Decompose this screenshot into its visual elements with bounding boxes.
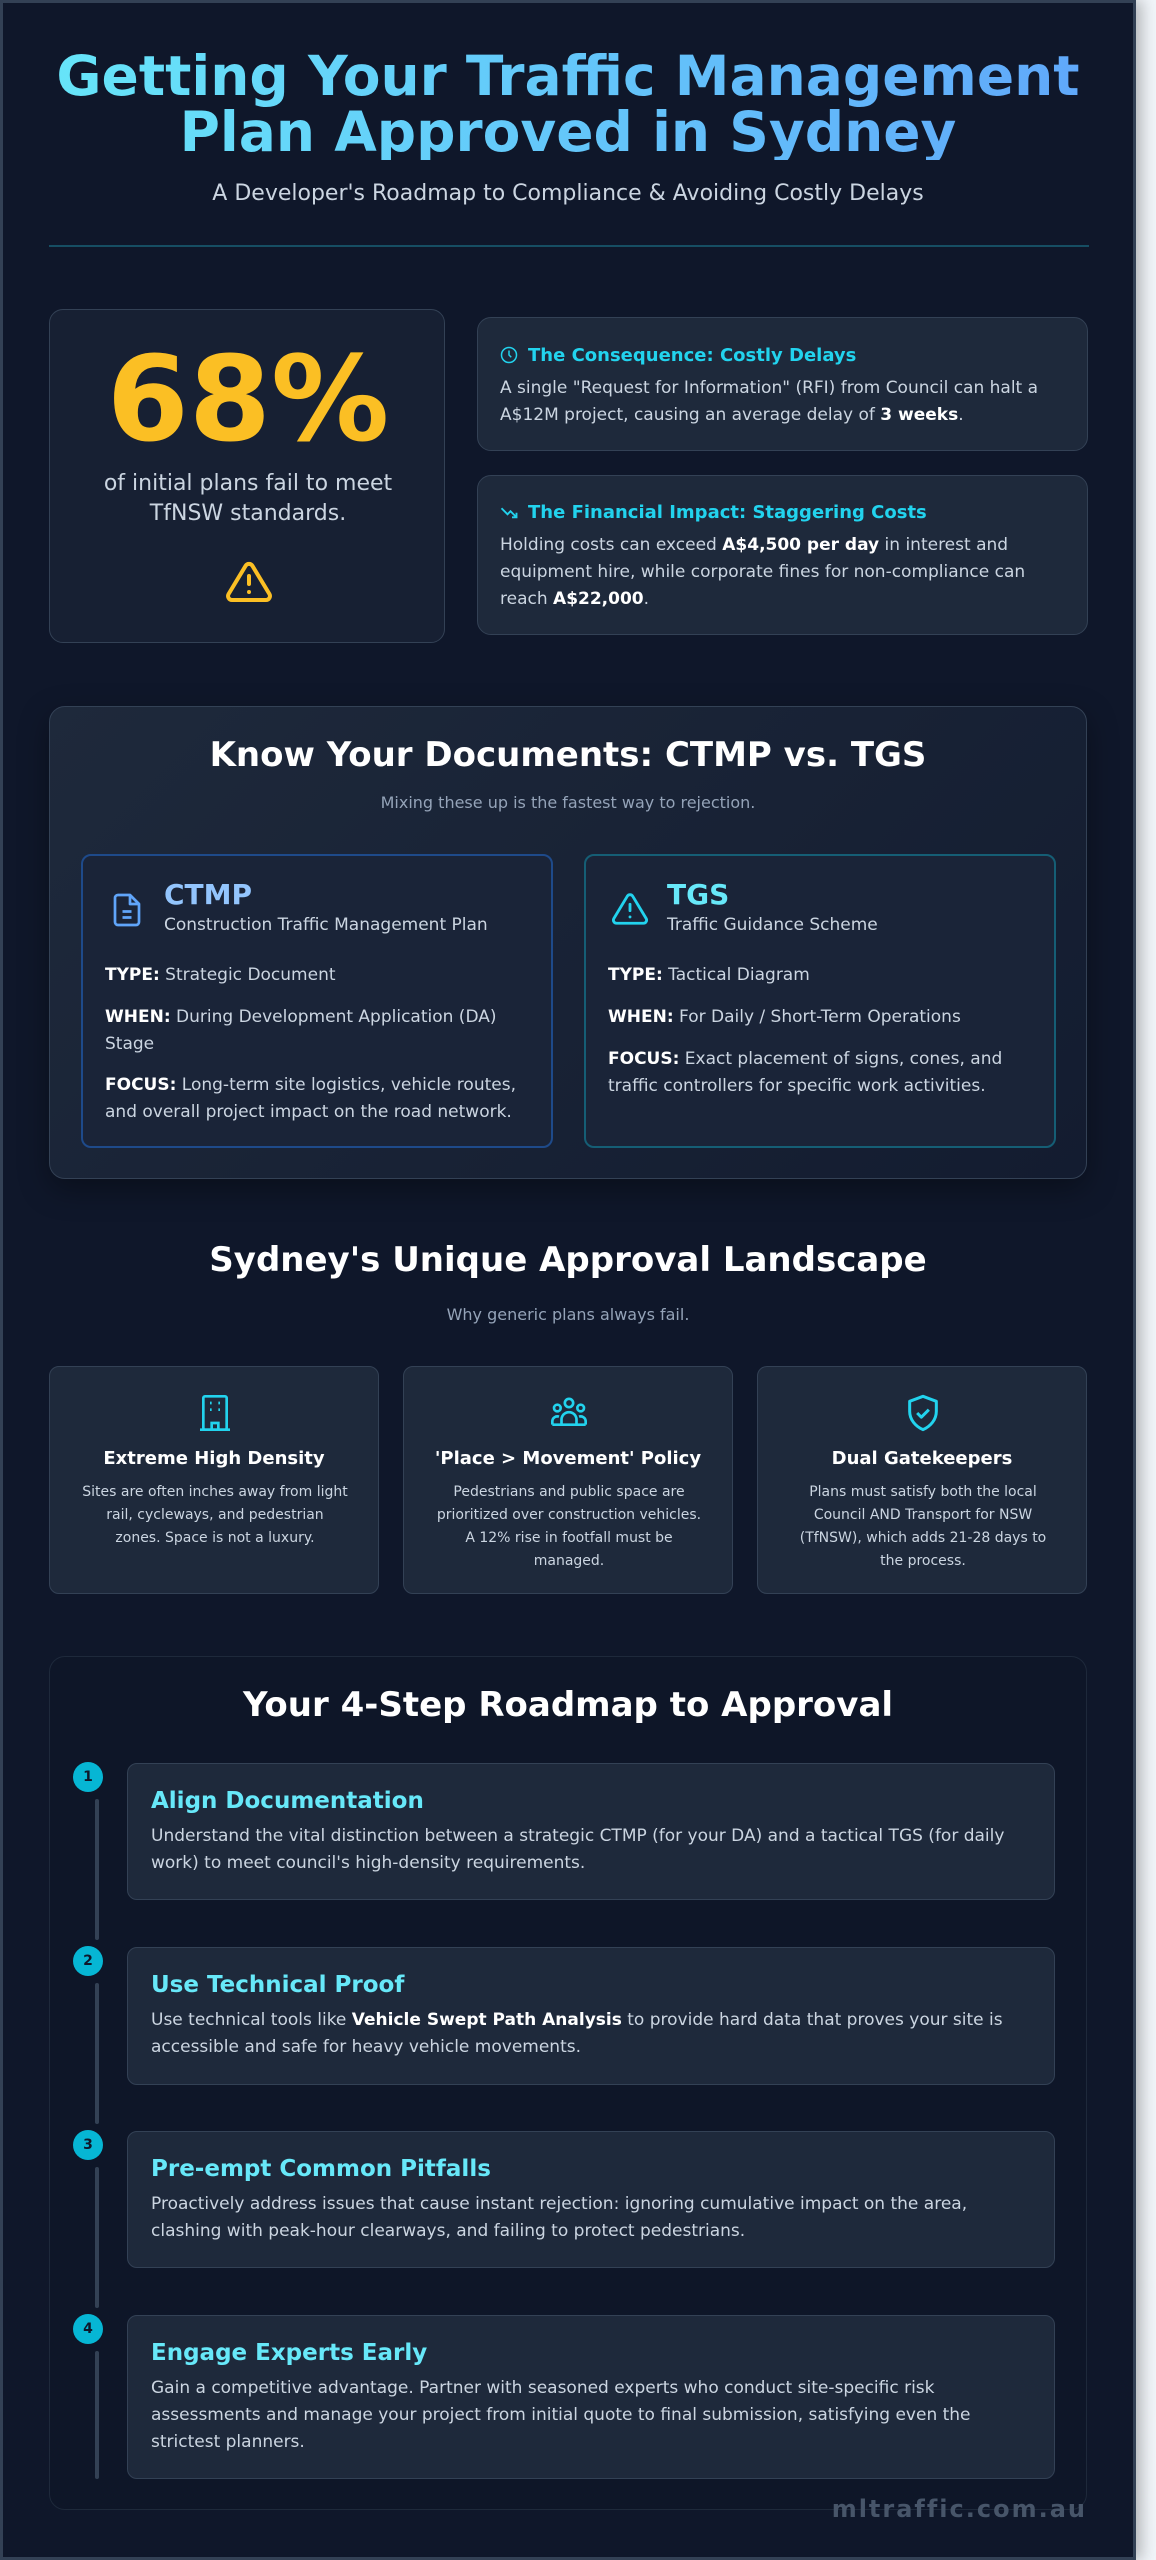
- text: Holding costs can exceed A$4,500 per day in interest and equipment hire, while corporate fines for non-compliance can reach A$22,000.: [500, 535, 1025, 609]
- title: Plan Approved in Sydney: [180, 100, 956, 164]
- step 2: [127, 1947, 1055, 2085]
- stat card: 68%: [49, 309, 445, 643]
- title: CTMP: [164, 878, 252, 911]
- stat description: of initial plans fail to meet: [104, 471, 392, 496]
- card: place > movement: Pedestrians and public space are prioritized over construction vehicles. A 12% rise in footfall must be managed.: [437, 1484, 701, 1569]
- icon: warning: [226, 562, 272, 602]
- card: TGS: Traffic Guidance Scheme: [667, 915, 878, 935]
- step 1: Align Documentation: [151, 1788, 424, 1814]
- panel: know your documents: [49, 706, 1087, 1179]
- card: dual gatekeepers: [757, 1366, 1087, 1594]
- subheading: Mixing these up is the fastest way to rejection.: [381, 793, 755, 812]
- subheading: landscape: Why generic plans always fail.: [447, 1305, 689, 1324]
- card: dual gatekeepers: Dual Gatekeepers: [832, 1448, 1012, 1469]
- card: place > movement: [403, 1366, 733, 1594]
- step 4: Gain a competitive advantage. Partner with seasoned experts who conduct site-specific risk assessments and manage your project from initial quote to final submission, satisfying even the strictest planners.: [151, 2378, 971, 2452]
- card: high density: Sites are often inches away from light rail, cycleways, and pedestrian zones. Space is not a luxury.: [82, 1484, 348, 1546]
- title: [0, 48, 1136, 160]
- step 3: Pre-empt Common Pitfalls: [151, 2156, 491, 2182]
- panel: roadmap: [49, 1656, 1087, 2510]
- heading: Know Your Documents: CTMP vs. TGS: [210, 735, 926, 775]
- card: high density: [49, 1366, 379, 1594]
- stat description: TfNSW standards.: [150, 501, 346, 526]
- card: consequence: [477, 317, 1088, 451]
- step 3: Proactively address issues that cause instant rejection: ignoring cumulative impact on the area, clashing with peak-hour clearways, and failing to protect pedestrians.: [151, 2194, 967, 2241]
- card: CTMP: Construction Traffic Management Plan: [164, 915, 488, 935]
- step 1 number: [73, 1762, 103, 1792]
- card: TGS: [584, 854, 1056, 1148]
- step 3: [127, 2131, 1055, 2268]
- footer: website: mltraffic.com.au: [832, 2495, 1087, 2523]
- card: CTMP: WHEN: During Development Application (DA) Stage: [105, 1007, 496, 1054]
- step 4: Engage Experts Early: [151, 2340, 427, 2366]
- step 2: Use Technical Proof: [151, 1972, 404, 1998]
- icon: building: [200, 1395, 230, 1431]
- card: TGS: WHEN: For Daily / Short-Term Operations: [608, 1007, 961, 1027]
- card: financial impact: [477, 475, 1088, 635]
- step 2 number: [73, 1946, 103, 1976]
- card: place > movement: 'Place > Movement' Policy: [435, 1448, 701, 1469]
- icon: people: [551, 1398, 587, 1426]
- step 1: Understand the vital distinction between a strategic CTMP (for your DA) and a tactical TGS (for daily work) to meet council's high-density requirements.: [151, 1826, 1004, 1873]
- card: CTMP: [81, 854, 553, 1148]
- heading with trend icon: The Financial Impact: Staggering Costs: [528, 502, 927, 523]
- heading: landscape: Sydney's Unique Approval Landscape: [209, 1240, 927, 1280]
- step 2: Use technical tools like Vehicle Swept Path Analysis to provide hard data that proves your site is accessible and safe for heavy vehicle movements.: [151, 2010, 1003, 2057]
- text: A single "Request for Information" (RFI) from Council can halt a A$12M project, causing an average delay of 3 weeks.: [500, 378, 1038, 425]
- details: TYPE: Strategic Document: [105, 965, 336, 985]
- card: CTMP: FOCUS: Long-term site logistics, vehicle routes, and overall project impact on the road network.: [105, 1075, 516, 1122]
- step 1 number: 1: [83, 1769, 93, 1785]
- step 3 number: 3: [83, 2137, 93, 2153]
- card: dual gatekeepers: Plans must satisfy both the local Council AND Transport for NSW (TfNSW), which adds 21-28 days to the process.: [800, 1484, 1046, 1569]
- step 4 number: [73, 2314, 103, 2344]
- step 3 number: [73, 2130, 103, 2160]
- step 4: [127, 2315, 1055, 2479]
- title: TGS: [667, 878, 729, 911]
- step 4 number: 4: [83, 2321, 93, 2337]
- heading: roadmap: Your 4-Step Roadmap to Approval: [243, 1685, 893, 1725]
- step 2 number: 2: [83, 1953, 93, 1969]
- subtitle: A Developer's Roadmap to Compliance & Avoiding Costly Delays: [212, 181, 924, 206]
- stat description: [104, 471, 392, 526]
- details: TYPE: Tactical Diagram: [608, 965, 810, 985]
- stat number: 68%: [107, 330, 389, 468]
- title: Getting Your Traffic Management: [56, 44, 1080, 108]
- step 1: [127, 1763, 1055, 1900]
- heading with clock icon: The Consequence: Costly Delays: [528, 345, 856, 366]
- icon: document: [114, 894, 140, 926]
- icon: warning: [612, 893, 648, 925]
- icon: shield: [908, 1394, 938, 1432]
- card: TGS: FOCUS: Exact placement of signs, cones, and traffic controllers for specific work activities.: [608, 1049, 1002, 1096]
- card: high density: Extreme High Density: [103, 1448, 325, 1469]
